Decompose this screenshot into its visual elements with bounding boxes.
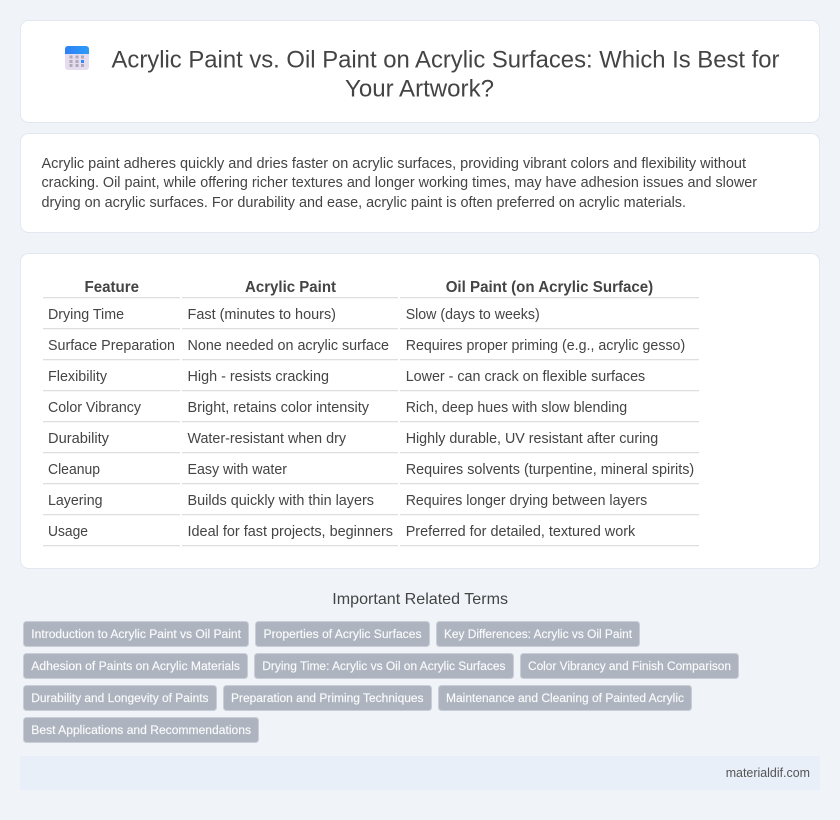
tag: Properties of Acrylic Surfaces xyxy=(264,627,422,641)
row: color vibrancy: Bright, retains color intensity xyxy=(188,400,370,416)
row: durability: Durability xyxy=(48,431,110,447)
footer: materialdif.com xyxy=(726,765,810,780)
tag: Best Applications and Recommendations xyxy=(31,723,251,737)
icon: calendar palette xyxy=(65,46,89,70)
tag: Introduction to Acrylic Paint vs Oil Paint xyxy=(31,627,242,641)
table header: Oil Paint (on Acrylic Surface) xyxy=(446,279,653,296)
row: usage: Preferred for detailed, textured work xyxy=(406,524,636,540)
panel: header xyxy=(20,20,820,122)
tag xyxy=(224,686,432,710)
tag: Adhesion of Paints on Acrylic Materials xyxy=(31,659,240,673)
table header: Feature xyxy=(84,279,139,296)
tag: Color Vibrancy and Finish Comparison xyxy=(528,659,731,673)
row: surface preparation xyxy=(43,338,699,360)
footer xyxy=(20,756,820,790)
row: layering: Requires longer drying between layers xyxy=(406,493,647,509)
row: durability: Highly durable, UV resistant after curing xyxy=(406,431,658,447)
row: color vibrancy: Rich, deep hues with slow blending xyxy=(406,400,627,416)
tag xyxy=(24,718,258,742)
tag: Key Differences: Acrylic vs Oil Paint xyxy=(444,627,633,641)
row: cleanup: Easy with water xyxy=(188,462,287,478)
tag xyxy=(520,654,738,678)
tag xyxy=(254,654,514,678)
panel: related term tags xyxy=(24,622,738,742)
row: surface preparation: None needed on acrylic surface xyxy=(188,338,389,354)
row: flexibility: Lower - can crack on flexible surfaces xyxy=(406,369,645,385)
row: usage: Usage xyxy=(48,524,88,540)
heading: important related terms: Important Related Terms xyxy=(332,591,508,608)
row: cleanup: Cleanup xyxy=(48,462,100,478)
text block: summary: Acrylic paint adheres quickly and dries faster on acrylic surfaces, providing vibrant colors and flexibility without xyxy=(42,156,746,172)
row: drying time: Fast (minutes to hours) xyxy=(188,307,336,323)
title: Acrylic Paint vs. Oil Paint on Acrylic Surfaces: Which Is Best for xyxy=(112,46,780,74)
row: flexibility: High - resists cracking xyxy=(188,369,329,385)
text block: summary: cracking. Oil paint, while offering richer textures and longer working times, may have adhesion issues and slower xyxy=(42,175,757,191)
table header: Acrylic Paint xyxy=(245,279,337,296)
row: flexibility: Flexibility xyxy=(48,369,108,385)
title xyxy=(112,46,780,102)
row: durability xyxy=(43,431,699,453)
row: cleanup: Requires solvents (turpentine, mineral spirits) xyxy=(406,462,694,478)
row: flexibility xyxy=(43,369,699,391)
tag xyxy=(24,622,248,646)
panel: introduction xyxy=(20,134,820,232)
row: drying time: Drying Time xyxy=(48,307,124,323)
row: usage xyxy=(43,524,699,546)
tag xyxy=(438,686,692,710)
tag: Durability and Longevity of Paints xyxy=(31,691,208,705)
row: cleanup xyxy=(43,462,699,484)
tag: Maintenance and Cleaning of Painted Acrylic xyxy=(446,691,684,705)
row: color vibrancy: Color Vibrancy xyxy=(48,400,142,416)
tag xyxy=(24,654,248,678)
row: layering xyxy=(43,493,699,515)
row: drying time xyxy=(43,307,699,329)
tag xyxy=(436,622,640,646)
row: color vibrancy xyxy=(43,400,699,422)
row: layering: Builds quickly with thin layers xyxy=(188,493,374,509)
text block: summary: drying on acrylic surfaces. For durability and ease, acrylic paint is often preferred on acrylic materials. xyxy=(42,195,686,211)
text block: summary xyxy=(42,156,757,211)
tag: Preparation and Priming Techniques xyxy=(231,691,424,705)
row: surface preparation: Requires proper priming (e.g., acrylic gesso) xyxy=(406,338,685,354)
table header xyxy=(43,279,699,298)
panel: comparison table xyxy=(20,254,820,568)
row: layering: Layering xyxy=(48,493,102,509)
row: durability: Water-resistant when dry xyxy=(188,431,347,447)
title: Your Artwork? xyxy=(345,76,494,102)
row: surface preparation: Surface Preparation xyxy=(48,338,175,354)
tag xyxy=(24,686,216,710)
tag: Drying Time: Acrylic vs Oil on Acrylic Surfaces xyxy=(262,659,506,673)
row: usage: Ideal for fast projects, beginners xyxy=(188,524,393,540)
row: drying time: Slow (days to weeks) xyxy=(406,307,540,323)
tag xyxy=(256,622,430,646)
